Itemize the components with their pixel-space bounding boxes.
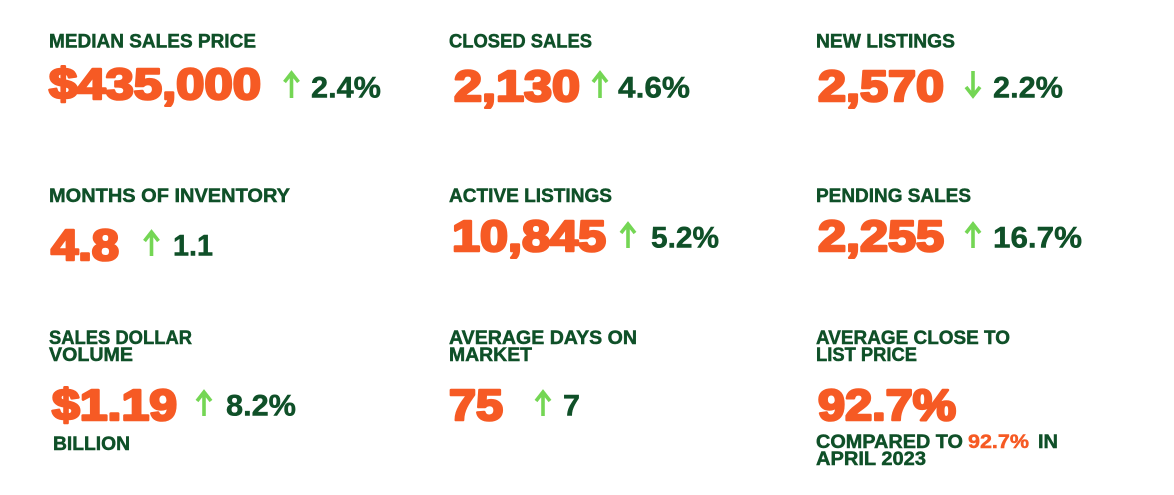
heading: median sales price: MEDIAN SALES PRICE	[49, 30, 256, 52]
change: 8.2%: 8.2%	[226, 390, 296, 422]
heading: sales dollar volume	[49, 327, 192, 366]
panel: sales dollar volume	[49, 327, 296, 455]
heading: average close to list price: LIST PRICE	[816, 344, 917, 366]
heading: pending sales: PENDING SALES	[816, 185, 971, 207]
comparison note: APRIL 2023	[816, 448, 926, 470]
change: 2.4%: 2.4%	[311, 72, 381, 104]
value: closed sales: 2,130	[454, 62, 580, 111]
panel: average close to list price	[816, 327, 1058, 470]
icon: up arrow	[197, 392, 211, 416]
heading: average days on market	[449, 327, 637, 366]
value: active listings: 10,845	[452, 212, 606, 261]
value: pending sales: 2,255	[818, 212, 944, 261]
panel: active listings	[449, 185, 719, 261]
change: 16.7%: 16.7%	[993, 222, 1082, 254]
heading: months of inventory: MONTHS OF INVENTORY	[49, 185, 290, 207]
icon: up arrow	[966, 224, 980, 248]
panel: median sales price	[49, 30, 381, 109]
icon: down arrow	[966, 71, 980, 96]
heading: sales dollar volume: VOLUME	[49, 344, 133, 366]
value: sales dollar volume: $1.19	[52, 381, 177, 430]
icon: up arrow	[144, 232, 158, 256]
change: 7: 7	[563, 390, 580, 422]
icon: up arrow	[621, 224, 635, 248]
panel: average days on market	[449, 327, 637, 430]
comparison note: 92.7%	[968, 431, 1029, 453]
panel: pending sales	[816, 185, 1082, 261]
icon: up arrow	[593, 73, 607, 98]
comparison note	[816, 431, 1058, 470]
change: 2.2%: 2.2%	[993, 72, 1063, 104]
heading: average close to list price: AVERAGE CLOSE TO	[816, 327, 1010, 349]
panel: new listings	[816, 30, 1063, 111]
heading: new listings: NEW LISTINGS	[816, 30, 955, 52]
value: median sales price: $435,000	[49, 60, 261, 109]
icon: up arrow	[536, 392, 550, 416]
panel: months of inventory	[49, 185, 290, 270]
unit: billion: BILLION	[53, 433, 130, 455]
heading: sales dollar volume: SALES DOLLAR	[49, 327, 192, 349]
heading: average days on market: AVERAGE DAYS ON	[449, 327, 637, 349]
heading: average days on market: MARKET	[449, 344, 532, 366]
icon: up arrow	[284, 73, 298, 98]
heading: closed sales: CLOSED SALES	[449, 30, 592, 52]
change: 4.6%: 4.6%	[618, 72, 690, 104]
heading: active listings: ACTIVE LISTINGS	[449, 185, 612, 207]
value: months of inventory: 4.8	[51, 221, 119, 270]
comparison note: IN	[1038, 431, 1058, 453]
heading: average close to list price	[816, 327, 1010, 366]
value: new listings: 2,570	[818, 62, 944, 111]
change: 5.2%: 5.2%	[651, 222, 719, 254]
change: 1.1: 1.1	[173, 230, 213, 262]
value: average close to list price: 92.7%	[818, 381, 956, 430]
value: average days on market: 75	[449, 381, 503, 430]
comparison note: COMPARED TO	[816, 431, 963, 453]
panel: closed sales	[449, 30, 690, 111]
